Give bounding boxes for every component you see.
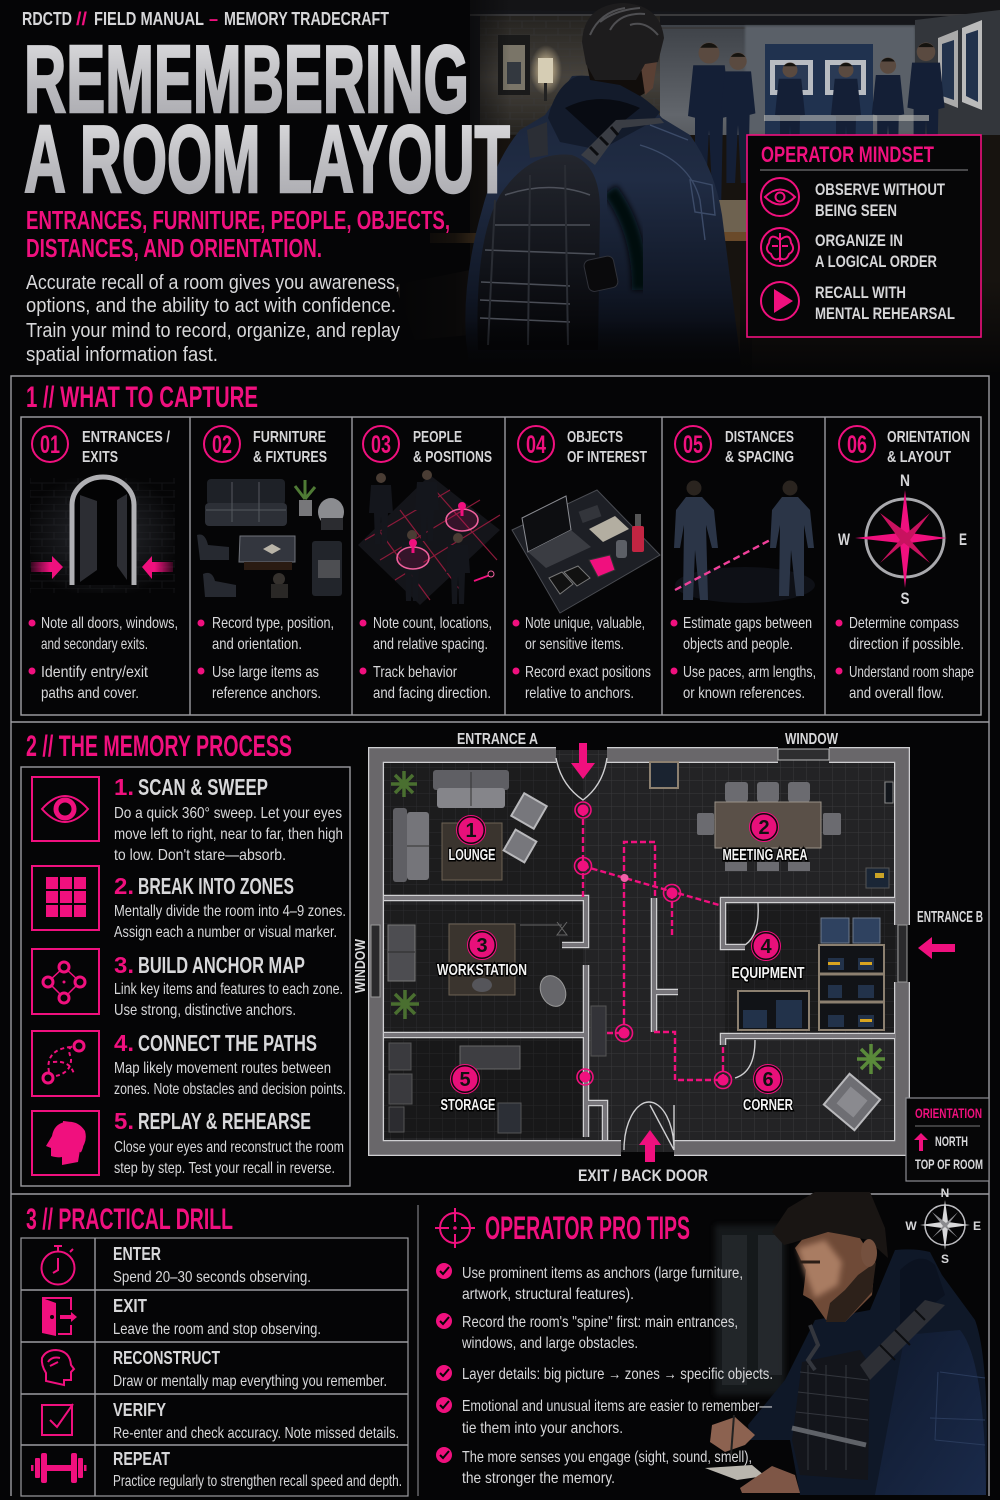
card: people: PEOPLE: [413, 429, 462, 446]
intro paragraph: [26, 272, 400, 366]
small compass: E: [973, 1219, 981, 1233]
card: furniture: Record type, position,: [212, 615, 334, 632]
card: objects: Record exact positions: [525, 664, 651, 681]
tip 5: the stronger the memory.: [462, 1470, 615, 1487]
card: people: and relative spacing.: [373, 636, 488, 653]
title: REMEMBERING: [24, 26, 469, 133]
card: orientation: and overall flow.: [849, 685, 944, 702]
arrow: entrance b: [918, 937, 955, 959]
card: orientation: & LAYOUT: [887, 449, 951, 466]
illustration: compass: W: [838, 530, 851, 549]
card: people: and facing direction.: [373, 685, 491, 702]
card: objects: 04: [526, 431, 546, 459]
tip 2: Record the room's "spine" first: main entrances,: [462, 1314, 738, 1331]
row: reconstruct: RECONSTRUCT: [113, 1348, 220, 1368]
outer walls: [371, 749, 907, 1148]
card: entrances: 01: [40, 431, 60, 459]
title: A ROOM LAYOUT: [24, 106, 510, 213]
card: entrances: and secondary exits.: [41, 636, 148, 653]
divider column: [417, 1205, 419, 1496]
equipment furniture: [738, 918, 884, 1030]
step 1: scan and sweep: Do a quick 360° sweep. Let your eyes: [114, 805, 342, 822]
card: distances: objects and people.: [683, 636, 793, 653]
zone markers: EQUIPMENT: [732, 965, 805, 982]
step 3: build anchor map: BUILD ANCHOR MAP: [138, 952, 305, 978]
map labels and arrows: WINDOW: [785, 731, 839, 748]
card: entrances: Note all doors, windows,: [41, 615, 178, 632]
card: distances: DISTANCES: [725, 429, 794, 446]
zone markers: WORKSTATION: [437, 962, 527, 979]
zone markers: 1: [465, 820, 477, 842]
card: people: [358, 426, 500, 702]
illustration: people on grid: [358, 470, 500, 605]
intro paragraph: options, and the ability to act with confidence.: [26, 295, 396, 317]
row: exit: Leave the room and stop observing.: [113, 1321, 321, 1338]
zone markers: 3: [476, 935, 488, 957]
row: repeat: REPEAT: [113, 1449, 170, 1469]
small compass: [905, 1186, 981, 1266]
card: objects: or sensitive items.: [525, 636, 624, 653]
card: people: 03: [371, 431, 391, 459]
vest: [792, 1350, 870, 1480]
row: reconstruct: [42, 1348, 387, 1390]
panel: orientation key: [906, 1098, 989, 1181]
small compass: W: [905, 1219, 917, 1233]
header tagline: MEMORY TRADECRAFT: [224, 9, 389, 29]
step 2: break into zones: BREAK INTO ZONES: [138, 873, 294, 899]
torso: [748, 1249, 987, 1495]
card: entrances: ENTRANCES /: [82, 429, 170, 446]
tip 4: Emotional and unusual items are easier to remember—: [462, 1398, 772, 1415]
step 5: replay and rehearse: step by step. Test your recall in reverse.: [114, 1160, 335, 1177]
zone markers: LOUNGE: [448, 847, 496, 864]
step 3: build anchor map: Link key items and features to each zone.: [114, 981, 343, 998]
card: distances: [670, 426, 816, 702]
zone markers: STORAGE: [440, 1097, 496, 1114]
movement routes: [583, 810, 723, 1080]
step 2: break into zones: Assign each a number or visual marker.: [114, 924, 337, 941]
row: exit: EXIT: [113, 1296, 147, 1316]
tip 5: [436, 1447, 752, 1487]
tip 4: tie them into your anchors.: [462, 1420, 623, 1437]
intro paragraph: spatial information fast.: [26, 344, 218, 366]
intro paragraph: Train your mind to record, organize, and replay: [26, 320, 400, 342]
row: verify: [42, 1400, 399, 1442]
step 4: connect the paths: 4.: [114, 1030, 134, 1056]
card: furniture: 02: [212, 431, 232, 459]
heading: what to capture: 1 // WHAT TO CAPTURE: [26, 381, 258, 414]
header tagline: RDCTD: [22, 9, 72, 29]
row: enter: [42, 1244, 311, 1286]
panel: operator mindset: BEING SEEN: [815, 201, 897, 220]
step 1: scan and sweep: [32, 774, 343, 864]
row: exit: [42, 1296, 321, 1338]
panel: operator mindset: OPERATOR MINDSET: [761, 142, 934, 167]
card: objects: OBJECTS: [567, 429, 623, 446]
tip 1: Use prominent items as anchors (large furniture,: [462, 1265, 743, 1282]
row: enter: ENTER: [113, 1244, 161, 1264]
tip 4: [436, 1397, 772, 1437]
illustration: compass: S: [900, 589, 910, 608]
tip 2: windows, and large obstacles.: [461, 1335, 638, 1352]
workstation furniture: [388, 922, 571, 1019]
panel: operator pro tips: [435, 1208, 773, 1487]
hero photo: operator watching a room: [395, 0, 1000, 375]
subtitle: DISTANCES, AND ORIENTATION.: [26, 233, 322, 263]
corner furniture: [824, 1044, 885, 1130]
step 4: connect the paths: zones. Note obstacles and decision points.: [114, 1081, 346, 1098]
panel: orientation key: NORTH: [935, 1133, 968, 1149]
row: enter: Spend 20–30 seconds observing.: [113, 1269, 311, 1286]
card: people: & POSITIONS: [413, 449, 492, 466]
panel: capture grid: [21, 417, 981, 715]
small compass: S: [941, 1252, 949, 1266]
step 2: break into zones: [32, 866, 346, 941]
card: orientation: direction if possible.: [849, 636, 964, 653]
heading: practical drill: 3 // PRACTICAL DRILL: [26, 1203, 233, 1236]
card: objects: Note unique, valuable,: [525, 615, 645, 632]
header tagline: [22, 9, 389, 29]
head: [795, 1228, 875, 1322]
arrow: entrance a: [571, 743, 595, 779]
zone markers: 4: [760, 936, 772, 958]
step 4: connect the paths: [32, 1030, 346, 1098]
subtitle: [26, 205, 450, 263]
step 1: scan and sweep: SCAN & SWEEP: [138, 774, 268, 800]
zone markers: CORNER: [743, 1097, 793, 1114]
step 5: replay and rehearse: Close your eyes and reconstruct the room: [114, 1139, 344, 1156]
card: orientation: 06: [847, 431, 867, 459]
card: entrances: paths and cover.: [41, 685, 139, 702]
card: distances: Use paces, arm lengths,: [683, 664, 816, 681]
meeting furniture: [650, 762, 893, 888]
step 3: build anchor map: 3.: [114, 952, 134, 978]
zone markers: 5: [459, 1069, 471, 1091]
step 2: break into zones: Mentally divide the room into 4–9 zones.: [114, 903, 346, 920]
icon: crosshair: [435, 1208, 475, 1248]
illustration: doorway: [30, 477, 175, 593]
icon: play: [761, 282, 799, 320]
illustration: compass: N: [900, 471, 910, 490]
interior walls: [384, 898, 895, 1140]
illustration: two figures and dashed gap: [674, 480, 815, 603]
zone markers: 2: [758, 817, 770, 839]
header tagline: –: [209, 9, 218, 29]
card: furniture: & FIXTURES: [253, 449, 327, 466]
zone markers: MEETING AREA: [722, 847, 808, 864]
illustration: furniture set: [197, 479, 344, 598]
card: furniture: and orientation.: [212, 636, 302, 653]
step 4: connect the paths: CONNECT THE PATHS: [138, 1030, 317, 1056]
row: verify: Re-enter and check accuracy. Note missed details.: [113, 1425, 399, 1442]
icon: eye: [761, 178, 799, 216]
step 5: replay and rehearse: [32, 1108, 344, 1177]
panel: operator pro tips: OPERATOR PRO TIPS: [485, 1210, 690, 1246]
card: objects: OF INTEREST: [567, 449, 647, 466]
step 4: connect the paths: Map likely movement routes between: [114, 1060, 331, 1077]
card: furniture: reference anchors.: [212, 685, 321, 702]
card: furniture: Use large items as: [212, 664, 319, 681]
heading: memory process: 2 // THE MEMORY PROCESS: [26, 730, 292, 763]
floor plan: [371, 749, 907, 1152]
lounge furniture: [391, 770, 547, 882]
tip 3: Layer details: big picture → zones → specific objects.: [462, 1366, 773, 1383]
tip 1: [436, 1263, 743, 1303]
header tagline: FIELD MANUAL: [94, 9, 204, 29]
panel: operator mindset: MENTAL REHEARSAL: [815, 304, 955, 323]
step 5: replay and rehearse: 5.: [114, 1108, 134, 1134]
panel: memory process steps: [21, 767, 350, 1186]
card: furniture: [197, 426, 344, 702]
card: furniture: FURNITURE: [253, 429, 326, 446]
map labels and arrows: EXIT / BACK DOOR: [578, 1166, 708, 1185]
card: orientation: ORIENTATION: [887, 429, 970, 446]
step 1: scan and sweep: to low. Don't stare—absorb.: [114, 847, 286, 864]
card: objects: relative to anchors.: [525, 685, 634, 702]
icon: brain: [761, 228, 799, 266]
section frame lines: [11, 376, 989, 1496]
door swings: [556, 758, 758, 1150]
panel: operator mindset: RECALL WITH: [815, 283, 906, 302]
storage furniture: [389, 1006, 606, 1133]
card: distances: 05: [683, 431, 703, 459]
arrow: exit: [639, 1130, 661, 1162]
map labels and arrows: WINDOW: [352, 938, 369, 993]
title: [24, 26, 510, 213]
card: people: Track behavior: [373, 664, 458, 681]
row: repeat: Practice regularly to strengthen recall speed and depth.: [113, 1473, 402, 1490]
step 3: build anchor map: [32, 949, 343, 1019]
subtitle: ENTRANCES, FURNITURE, PEOPLE, OBJECTS,: [26, 205, 450, 235]
card: distances: & SPACING: [725, 449, 794, 466]
card: orientation: Determine compass: [849, 615, 959, 632]
card: objects: [512, 426, 660, 702]
floor: [372, 750, 906, 1152]
panel: operator mindset: [747, 135, 981, 337]
route nodes: [574, 802, 732, 1088]
row: verify: VERIFY: [113, 1400, 166, 1420]
card: entrances: Identify entry/exit: [41, 664, 148, 681]
card: entrances: [28, 426, 178, 702]
illustration: compass: [838, 471, 967, 608]
tip 5: The more senses you engage (sight, sound, smell),: [462, 1449, 752, 1466]
step 3: build anchor map: Use strong, distinctive anchors.: [114, 1002, 296, 1019]
card: distances: or known references.: [683, 685, 805, 702]
step 1: scan and sweep: 1.: [114, 774, 134, 800]
panel: operator mindset: OBSERVE WITHOUT: [815, 180, 945, 199]
illustration: desk objects: [512, 490, 660, 613]
card: orientation: [836, 426, 974, 702]
card: people: Note count, locations,: [373, 615, 492, 632]
step 5: replay and rehearse: REPLAY & REHEARSE: [138, 1108, 311, 1134]
tip 1: artwork, structural features).: [462, 1286, 634, 1303]
intro paragraph: Accurate recall of a room gives you awareness,: [26, 272, 400, 294]
header tagline: //: [76, 9, 87, 29]
row: repeat: [31, 1449, 402, 1490]
zone markers: 6: [762, 1069, 774, 1091]
head: [586, 60, 655, 96]
table: practical drill: [21, 1238, 408, 1496]
main figure: [462, 3, 752, 375]
hands and notebook: [710, 1417, 755, 1452]
small compass: N: [941, 1186, 949, 1200]
photo: operator writing notes: [705, 1192, 987, 1495]
panel: operator mindset: ORGANIZE IN: [815, 231, 903, 250]
zone markers: [437, 812, 808, 1114]
map labels and arrows: ENTRANCE A: [457, 731, 538, 748]
card: distances: Estimate gaps between: [683, 615, 812, 632]
step 1: scan and sweep: move left to right, near to far, then high: [114, 826, 343, 843]
illustration: compass: E: [959, 530, 967, 549]
panel: operator mindset: A LOGICAL ORDER: [815, 252, 937, 271]
tip 2: [436, 1313, 738, 1352]
map labels and arrows: [352, 731, 983, 1185]
row: reconstruct: Draw or mentally map everything you remember.: [113, 1373, 387, 1390]
card: entrances: EXITS: [82, 449, 118, 466]
step 2: break into zones: 2.: [114, 873, 134, 899]
